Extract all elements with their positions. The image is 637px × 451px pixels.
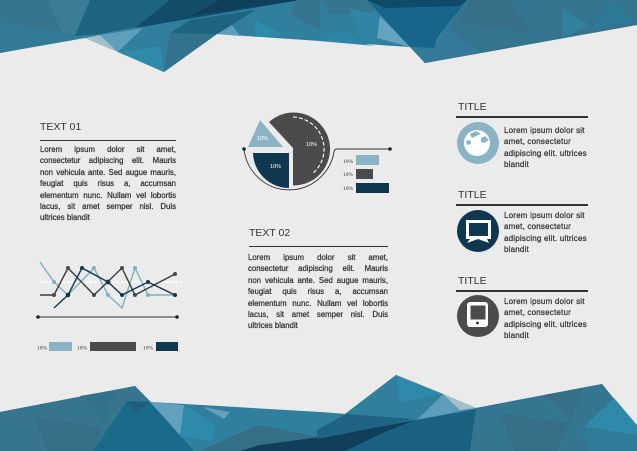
text block: text 01: feugiat quis risus a, accumsan: [40, 179, 176, 188]
heading: title 3: TITLE: [458, 275, 487, 287]
pie chart: 10%: [343, 159, 354, 165]
text block: text 02: elementum nunc. Nullam vel lobortis: [248, 299, 388, 308]
pie chart: 10%: [306, 142, 317, 148]
heading: title 1: TITLE: [458, 101, 487, 113]
heading: text 02: TEXT 02: [249, 227, 290, 239]
text block: title 2: Lorem ipsum dolor sit: [504, 211, 585, 220]
text block: title 2: [504, 211, 587, 254]
text block: text 02: Lorem ipsum dolor sit amet,: [248, 253, 388, 262]
icon: presentation screen: [457, 210, 499, 252]
icon: globe: [457, 122, 499, 164]
legend: line chart: 10%: [77, 346, 88, 352]
text block: title 3: [504, 297, 587, 340]
text block: text 02: feugiat quis risus a, accumsan: [248, 287, 388, 296]
rule: text 01: [40, 140, 176, 141]
heading: title 2: TITLE: [458, 189, 487, 201]
rule: title 1: [456, 116, 588, 118]
pie chart: [242, 112, 392, 193]
pie chart: 10%: [270, 164, 281, 170]
text block: title 3: blandit: [504, 331, 529, 340]
top polygon banner: [0, 0, 637, 72]
text block: title 3: adipiscing elit. ultrices: [504, 320, 587, 329]
text block: text 01: elementum nunc. Nullam vel lobortis: [40, 191, 176, 200]
legend: line chart: 10%: [37, 346, 48, 352]
text block: text 01: [40, 145, 176, 222]
text block: title 1: adipiscing elit. ultrices: [504, 149, 587, 158]
pie chart: 10%: [343, 186, 354, 192]
text block: text 02: consectetur adipiscing elit. Mauris: [248, 264, 388, 273]
text block: title 3: amet, consectetur: [504, 308, 571, 317]
rule: title 3: [456, 290, 588, 292]
text block: text 02: ultrices blandit: [248, 321, 298, 330]
text block: title 3: Lorem ipsum dolor sit: [504, 297, 585, 306]
text block: text 01: lacus, sit amet semper nisl. Duis: [40, 202, 176, 211]
text block: title 1: Lorem ipsum dolor sit: [504, 126, 585, 135]
text block: text 01: Lorem ipsum dolor sit amet,: [40, 145, 176, 154]
pie chart: 10%: [257, 136, 268, 142]
text block: title 2: amet, consectetur: [504, 222, 571, 231]
legend: line chart: 10%: [143, 346, 154, 352]
text block: title 1: amet, consectetur: [504, 137, 571, 146]
text block: text 02: non vehicula ante. Sed augue mauris,: [248, 276, 388, 285]
text block: title 1: blandit: [504, 160, 529, 169]
text block: title 2: adipiscing elit. ultrices: [504, 234, 587, 243]
text block: text 01: non vehicula ante. Sed augue mauris,: [40, 168, 176, 177]
pie slice: light: [248, 120, 283, 147]
bottom polygon banner: [0, 375, 637, 451]
heading: text 01: TEXT 01: [40, 121, 81, 133]
line chart: [36, 262, 182, 319]
pie chart: 10%: [343, 172, 354, 178]
text block: text 02: lacus, sit amet semper nisl. Duis: [248, 310, 388, 319]
icon: tablet: [457, 295, 499, 337]
text block: text 02: [248, 253, 388, 330]
text block: text 01: consectetur adipiscing elit. Mauris: [40, 156, 176, 165]
pie slice: navy: [253, 153, 289, 188]
text block: text 01: ultrices blandit: [40, 213, 90, 222]
legend: line chart: [37, 342, 178, 352]
rule: title 2: [456, 204, 588, 206]
pie slice: large: [269, 113, 330, 186]
text block: title 2: blandit: [504, 245, 529, 254]
text block: title 1: [504, 126, 587, 169]
rule: text 02: [249, 246, 388, 247]
